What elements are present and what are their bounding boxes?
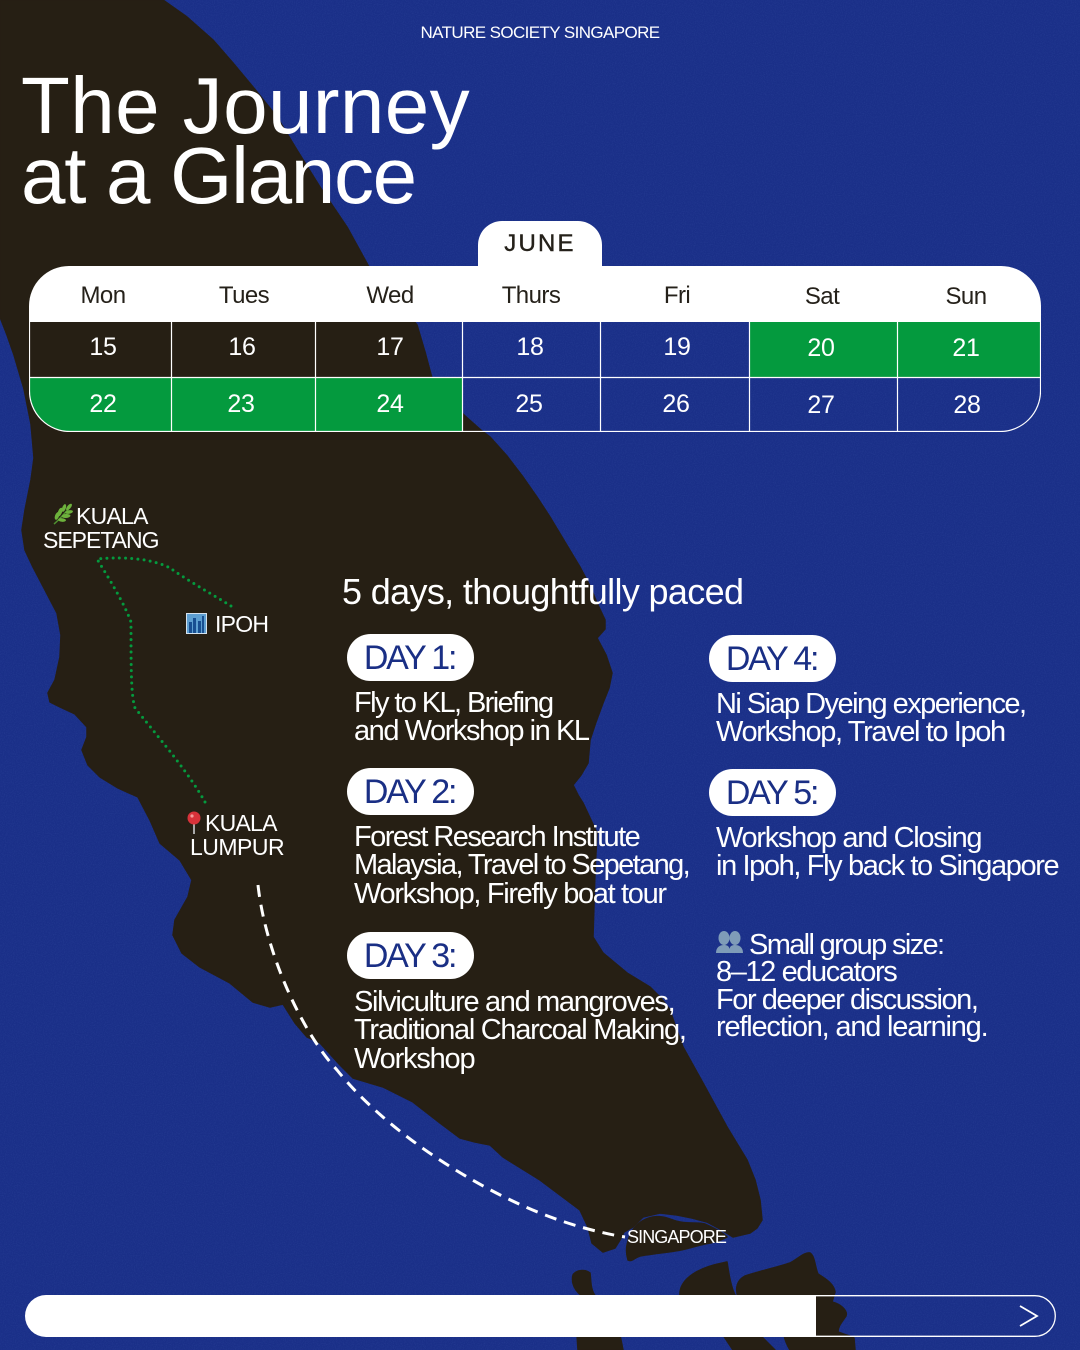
day 3 badge xyxy=(347,932,474,979)
day 2 text: Forest Research Institute xyxy=(354,821,639,853)
organisation label: NATURE SOCIETY SINGAPORE xyxy=(420,23,660,42)
day 5 text: Workshop and Closing xyxy=(716,822,981,854)
label: Ipoh: IPOH xyxy=(215,611,268,637)
day 4 text: Workshop, Travel to Ipoh xyxy=(716,716,1005,748)
day 1 text xyxy=(354,687,590,747)
weekday headers: Wed xyxy=(366,282,414,309)
day 1 text: Fly to KL, Briefing xyxy=(354,687,552,719)
group size note xyxy=(716,929,987,1043)
day 2 badge: DAY 2: xyxy=(364,773,455,811)
date numbers: 22 xyxy=(89,390,117,418)
date numbers: 19 xyxy=(663,333,691,361)
group size text: Small group size: xyxy=(749,929,943,961)
day 5 badge xyxy=(709,769,836,816)
weekday headers: Thurs xyxy=(502,282,560,309)
title: at a Glance xyxy=(21,131,416,220)
date numbers xyxy=(89,333,981,419)
day 1 text: and Workshop in KL xyxy=(354,715,589,747)
group size text: For deeper discussion, xyxy=(716,984,977,1016)
day 2 text: Malaysia, Travel to Sepetang, xyxy=(354,849,689,881)
date numbers: 28 xyxy=(953,391,981,419)
group size text xyxy=(716,929,987,1043)
day 2 text: Workshop, Firefly boat tour xyxy=(354,878,666,910)
heading: 5 days: 5 days, thoughtfully paced xyxy=(342,571,743,612)
day 5 badge: DAY 5: xyxy=(726,774,817,812)
route: Kuala Lumpur to Sepetang to Ipoh xyxy=(96,556,232,804)
date numbers: 24 xyxy=(376,390,404,418)
day 3 text: Workshop xyxy=(354,1043,474,1075)
day 3 text xyxy=(354,986,686,1075)
date numbers: 23 xyxy=(227,390,255,418)
icon: herb xyxy=(54,504,73,524)
date numbers: 17 xyxy=(376,333,404,361)
day 4 text: Ni Siap Dyeing experience, xyxy=(716,688,1026,720)
icon: pin xyxy=(188,812,200,834)
progress bar xyxy=(25,1295,1056,1337)
group size text: reflection, and learning. xyxy=(716,1011,987,1043)
weekday headers: Fri xyxy=(664,282,690,309)
day 1 xyxy=(347,634,590,747)
date numbers: 16 xyxy=(228,333,256,361)
label: Kuala Sepetang: KUALA xyxy=(76,503,148,529)
weekday headers: Sat xyxy=(805,283,839,310)
label: Kuala Sepetang: SEPETANG xyxy=(43,527,159,553)
day 5 text xyxy=(716,822,1058,882)
label: Singapore: SINGAPORE xyxy=(627,1227,726,1247)
month tab xyxy=(478,221,602,267)
day 1 badge xyxy=(347,634,474,681)
day 3 text: Silviculture and mangroves, xyxy=(354,986,674,1018)
day 1 badge: DAY 1: xyxy=(364,639,455,677)
label: Kuala Sepetang xyxy=(43,503,159,553)
date numbers: 15 xyxy=(89,333,117,361)
label: Kuala Lumpur xyxy=(188,810,284,860)
icon: cityscape xyxy=(186,613,207,634)
day 4 xyxy=(709,635,1026,748)
weekday headers: Mon xyxy=(80,282,126,309)
calendar xyxy=(29,221,1041,432)
day 2 text xyxy=(354,821,689,910)
month tab: JUNE xyxy=(504,230,576,257)
day 2 xyxy=(347,768,689,910)
label: Ipoh xyxy=(186,611,268,637)
date numbers: 21 xyxy=(952,334,980,362)
icon: arrow xyxy=(1020,1306,1037,1326)
weekday headers: Sun xyxy=(945,283,987,310)
group size text: 8–12 educators xyxy=(716,956,896,988)
icon: people xyxy=(716,931,743,953)
date numbers: 25 xyxy=(515,390,543,418)
date numbers: 20 xyxy=(807,334,835,362)
day 3 xyxy=(347,932,686,1075)
day 4 text xyxy=(716,688,1026,748)
title xyxy=(21,61,470,220)
label: Kuala Lumpur: KUALA xyxy=(205,810,277,836)
weekday headers: Tues xyxy=(219,282,269,309)
title: The Journey xyxy=(21,61,470,150)
calendar grid xyxy=(29,266,1041,432)
date numbers: 26 xyxy=(662,390,690,418)
weekday headers xyxy=(80,282,987,310)
day 3 text: Traditional Charcoal Making, xyxy=(354,1014,686,1046)
day 4 badge xyxy=(709,635,836,682)
day 3 badge: DAY 3: xyxy=(364,937,455,975)
label: Kuala Lumpur: LUMPUR xyxy=(190,834,284,860)
date numbers: 18 xyxy=(516,333,544,361)
day 5 xyxy=(709,769,1058,882)
day 2 badge xyxy=(347,768,474,815)
date numbers: 27 xyxy=(807,391,835,419)
route: flight to Singapore xyxy=(256,884,626,1238)
day 4 badge: DAY 4: xyxy=(726,640,817,678)
day 5 text: in Ipoh, Fly back to Singapore xyxy=(716,850,1058,882)
